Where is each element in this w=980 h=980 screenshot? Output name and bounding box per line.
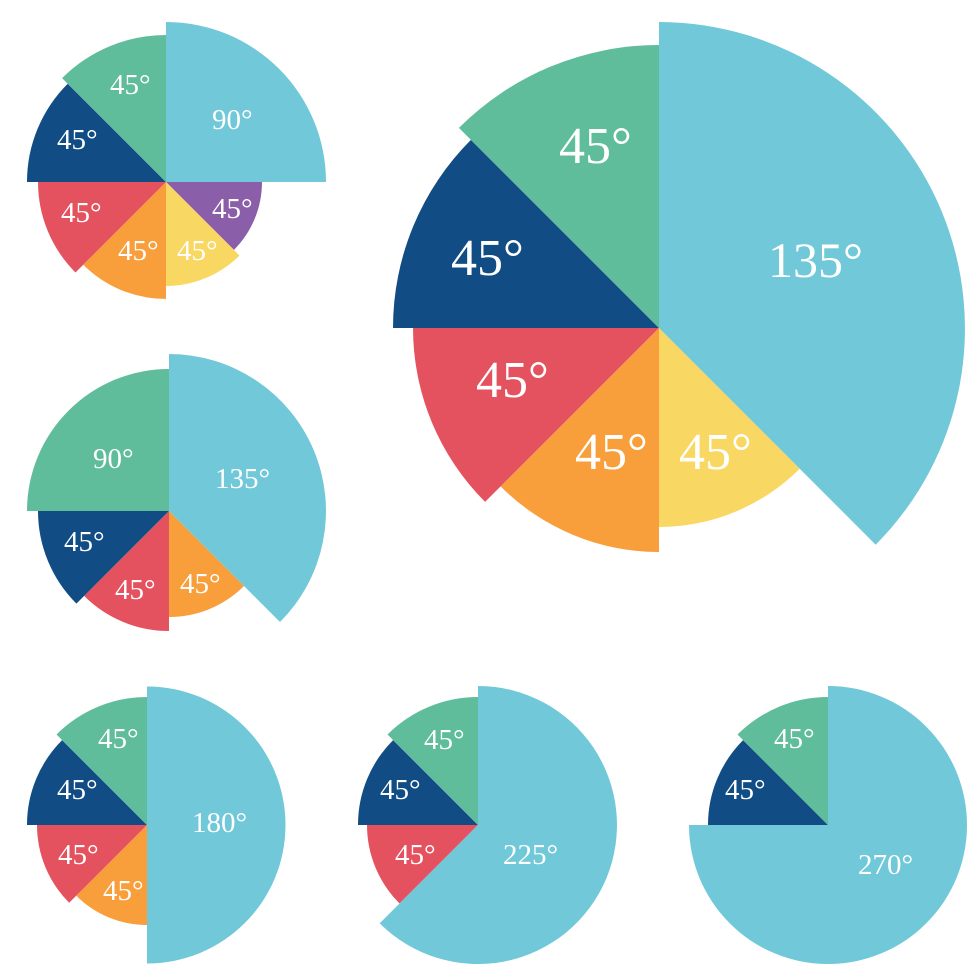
slice: blue 225 degrees [380, 686, 617, 964]
slice: green 45 degrees: 45° [774, 723, 815, 755]
slice: blue 135 degrees [659, 22, 965, 545]
slice: blue 135 degrees: 135° [768, 232, 863, 288]
slice: navy 45 degrees [38, 511, 169, 604]
slice: red 45 degrees [413, 328, 659, 502]
slice: blue 135 degrees: 135° [215, 463, 270, 495]
slice: orange 45 degrees [76, 825, 147, 925]
slice: red 45 degrees: 45° [58, 839, 99, 871]
slice: navy 45 degrees: 45° [380, 774, 421, 806]
slice: red 45 degrees: 45° [395, 839, 436, 871]
chart: small pie 180 degrees [27, 686, 285, 964]
chart: small pie 225 degrees [358, 686, 617, 964]
slice: purple 45 degrees [166, 182, 262, 250]
slice: blue 135 degrees [169, 354, 326, 622]
slice: blue 270 degrees: 270° [858, 849, 913, 881]
slice: navy 45 degrees: 45° [725, 774, 766, 806]
chart: large pie 135 degrees [393, 22, 965, 552]
slice: orange 45 degrees: 45° [103, 875, 144, 907]
slice: red 45 degrees [84, 511, 169, 631]
slice: red 45 degrees [367, 825, 478, 904]
slice: green 45 degrees: 45° [110, 69, 151, 101]
slice: navy 45 degrees [27, 84, 166, 182]
slice: green 90 degrees [27, 369, 169, 511]
slice: red 45 degrees: 45° [476, 352, 549, 409]
slice: yellow 45 degrees [166, 182, 240, 286]
chart: small pie 135 degrees [27, 354, 326, 631]
slice: navy 45 degrees [393, 140, 659, 328]
slice: navy 45 degrees [27, 740, 147, 825]
slice: blue 180 degrees: 180° [192, 807, 247, 839]
chart: small pie 90 degrees [27, 22, 326, 299]
slice: navy 45 degrees: 45° [57, 124, 98, 156]
slice: navy 45 degrees: 45° [64, 526, 105, 558]
slice: green 45 degrees [738, 697, 828, 825]
slice: orange 45 degrees [83, 182, 166, 299]
slice: green 45 degrees: 45° [424, 724, 465, 756]
slice: blue 90 degrees [166, 22, 326, 182]
slice: red 45 degrees: 45° [115, 574, 156, 606]
slice: green 45 degrees [459, 45, 659, 328]
slice: orange 45 degrees: 45° [575, 424, 648, 481]
slice: green 90 degrees: 90° [93, 443, 134, 475]
slice: green 45 degrees: 45° [98, 723, 139, 755]
slice: green 45 degrees [56, 697, 147, 825]
slice: orange 45 degrees: 45° [118, 235, 159, 267]
slice: yellow 45 degrees: 45° [177, 235, 218, 267]
slice: orange 45 degrees: 45° [180, 568, 221, 600]
slice: orange 45 degrees [501, 328, 659, 552]
slice: blue 90 degrees: 90° [212, 104, 253, 136]
slice: navy 45 degrees [708, 740, 828, 825]
slice: green 45 degrees: 45° [559, 118, 632, 175]
slice: red 45 degrees [37, 825, 147, 903]
chart: small pie 270 degrees [689, 686, 967, 964]
slice: blue 180 degrees [147, 686, 286, 964]
slice: green 45 degrees [388, 697, 478, 825]
slice: orange 45 degrees [169, 511, 244, 617]
slice: red 45 degrees [38, 182, 166, 272]
slice: blue 270 degrees [689, 686, 967, 964]
slice: yellow 45 degrees: 45° [679, 424, 752, 481]
slice: red 45 degrees: 45° [61, 197, 102, 229]
slice: navy 45 degrees: 45° [451, 230, 524, 287]
slice: yellow 45 degrees [659, 328, 800, 527]
slice: navy 45 degrees [358, 740, 478, 825]
slice: blue 225 degrees: 225° [503, 839, 558, 871]
slice: purple 45 degrees: 45° [212, 193, 253, 225]
slice: navy 45 degrees: 45° [57, 774, 98, 806]
slice: green 45 degrees [62, 35, 166, 182]
